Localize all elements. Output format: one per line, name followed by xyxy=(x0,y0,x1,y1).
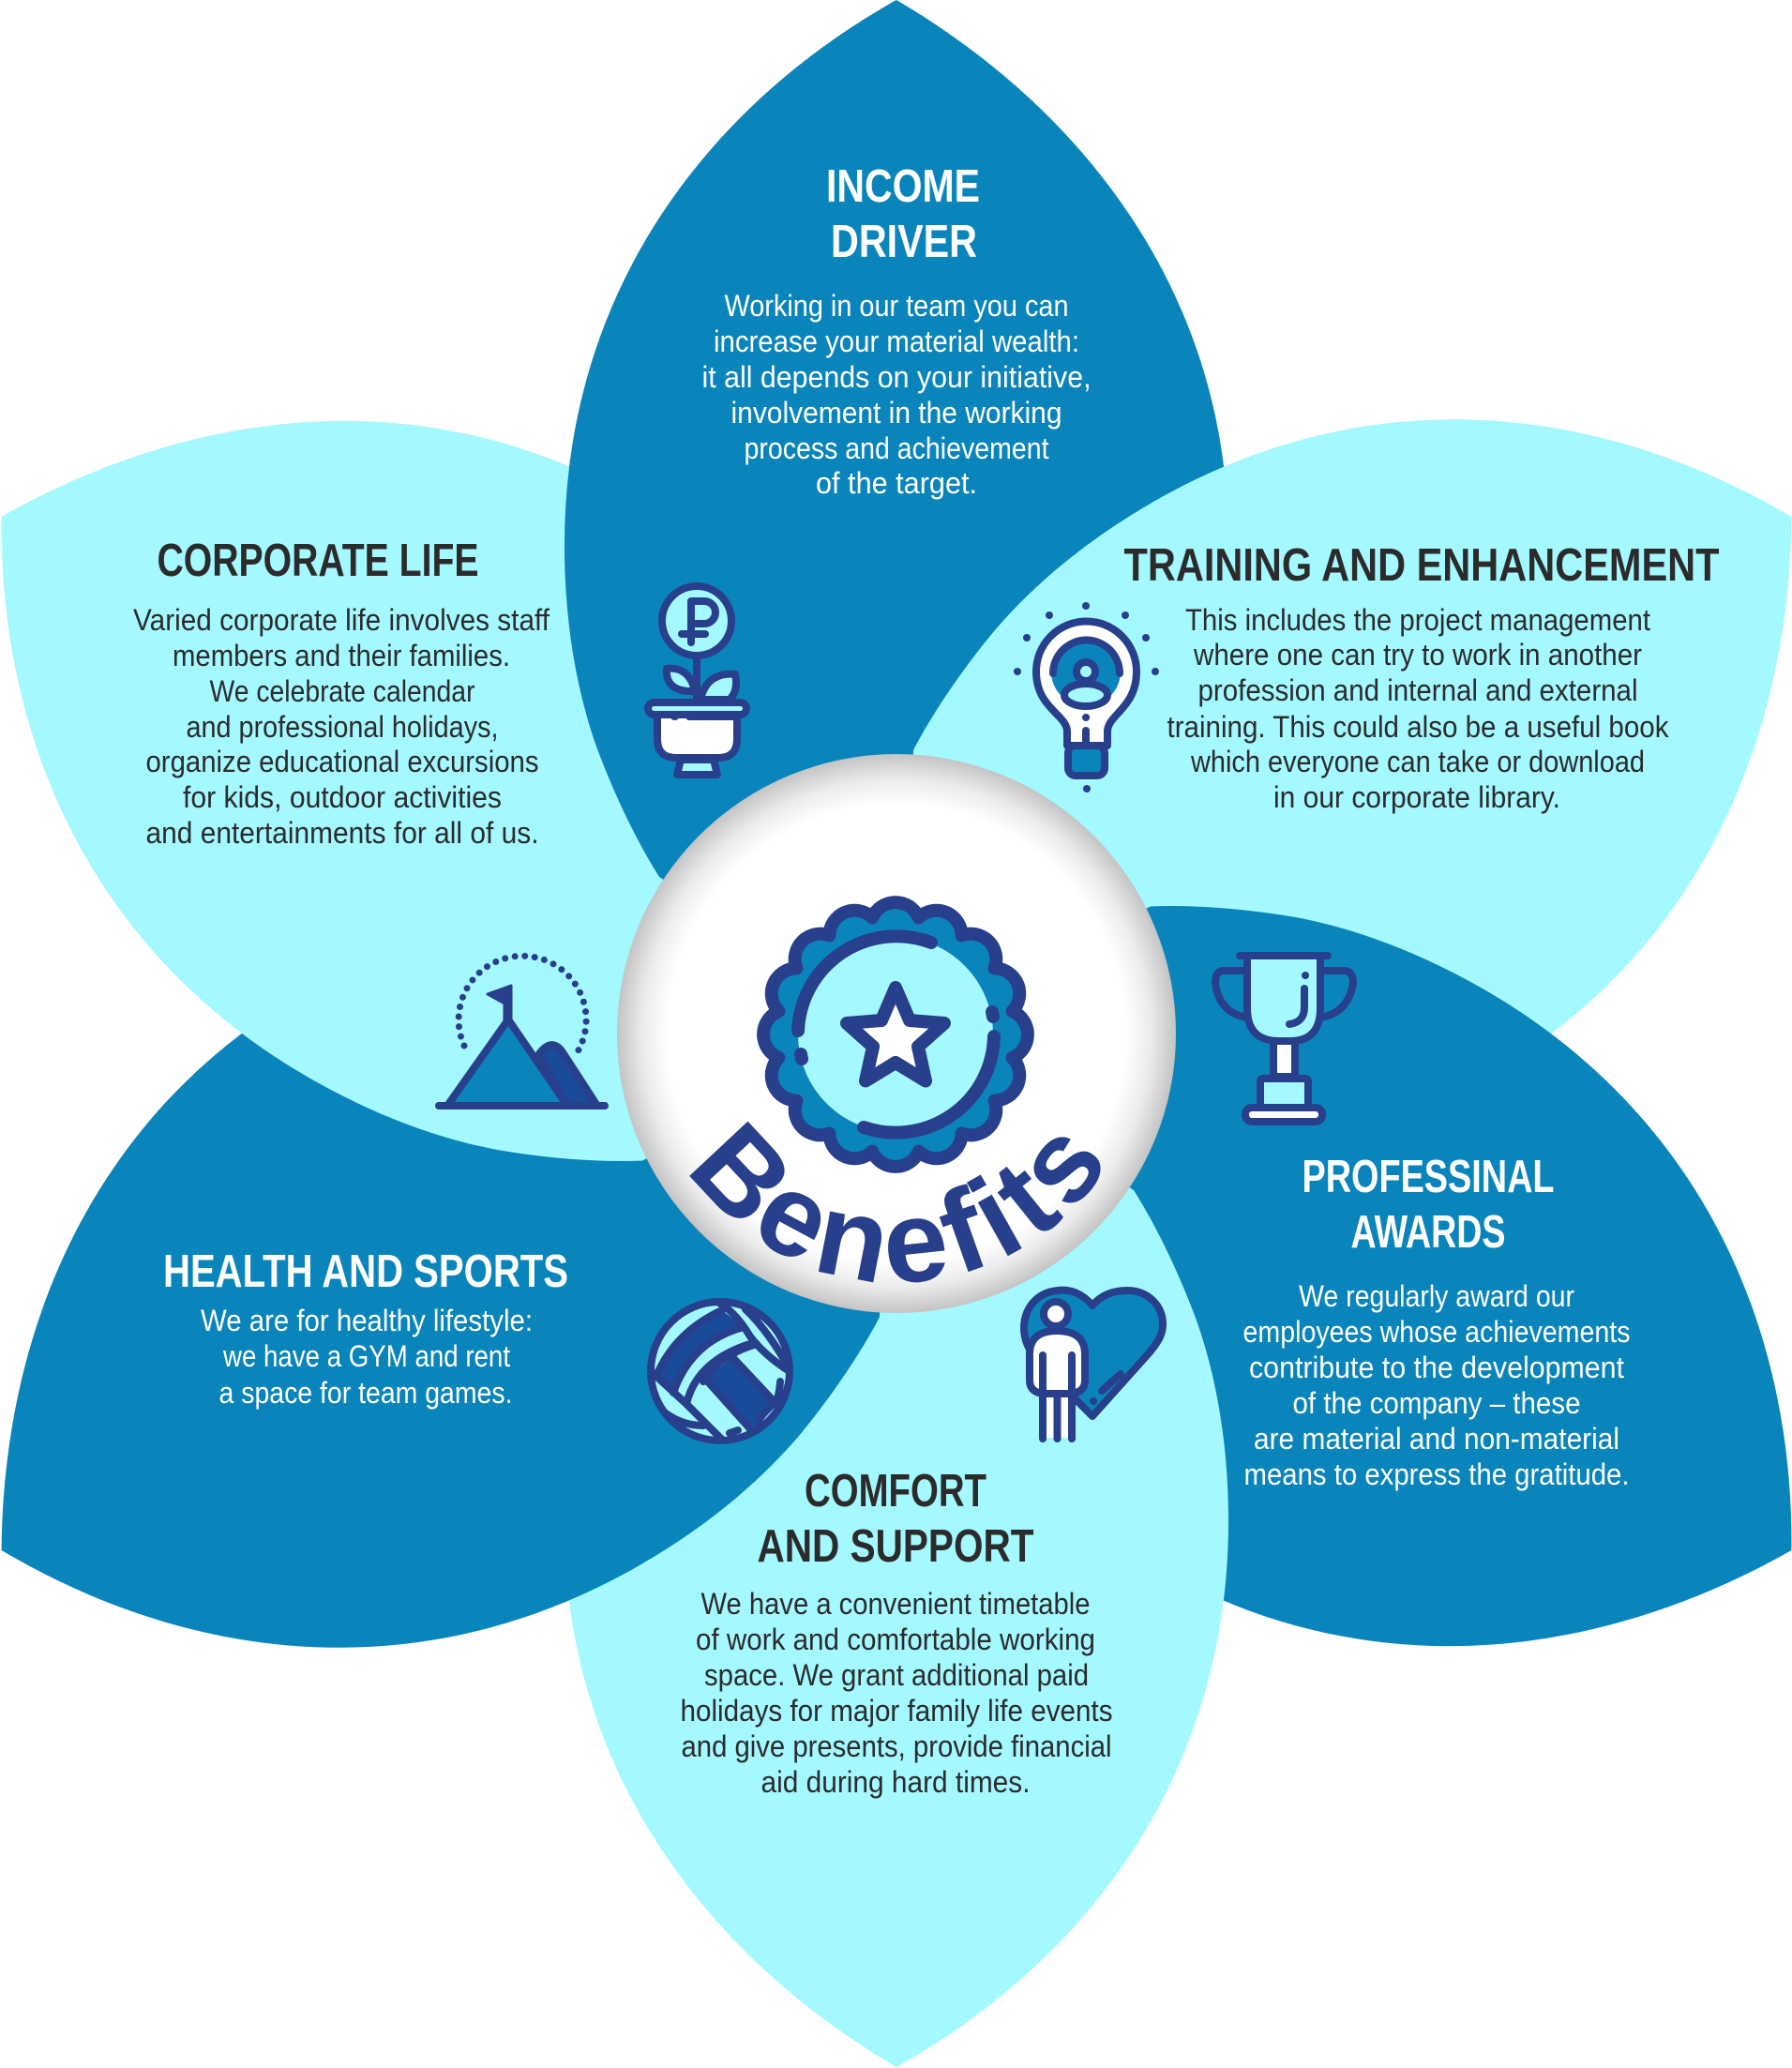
petal: corporate life xyxy=(0,229,1062,1321)
text block: health and sports xyxy=(201,1304,533,1410)
icon: person with heart xyxy=(1024,1291,1163,1439)
text block: health and sports: we have a GYM and rent xyxy=(222,1339,510,1373)
text block: income driver: process and achievement xyxy=(745,431,1049,465)
heading: comfort and support xyxy=(758,1466,1034,1572)
text block: professional awards: employees whose achievements xyxy=(1243,1315,1630,1349)
text block: income driver: Working in our team you can xyxy=(724,289,1069,323)
petal: training and enhancement xyxy=(730,229,1792,1321)
petal: professional awards xyxy=(730,746,1792,1838)
text block: professional awards: are material and non-material xyxy=(1254,1422,1619,1456)
heading: income driver: INCOME xyxy=(826,161,980,212)
text block: income driver: of the target. xyxy=(816,466,977,500)
icon: light bulb with person xyxy=(1014,602,1159,792)
text block: professional awards: We regularly award our xyxy=(1299,1279,1574,1313)
heading: professional awards: AWARDS xyxy=(1350,1207,1506,1258)
text block: training and enhancement: in our corporate library. xyxy=(1273,780,1560,814)
petal: income driver xyxy=(565,0,1228,1034)
heading: income driver xyxy=(826,161,980,267)
icon: trophy xyxy=(1215,956,1353,1122)
panel text: health and sports xyxy=(163,1246,568,1410)
heading: professional awards xyxy=(1302,1152,1555,1258)
central disc: benefits xyxy=(617,754,1176,1313)
title: Benefits: Benefits xyxy=(689,1122,1101,1283)
heading: professional awards: PROFESSINAL xyxy=(1302,1152,1555,1202)
text block: comfort and support: of work and comfortable working xyxy=(696,1623,1095,1656)
text block: comfort and support: space. We grant additional paid xyxy=(704,1658,1089,1692)
disc xyxy=(617,754,1176,1313)
text block: corporate life: We celebrate calendar xyxy=(210,674,475,708)
text block: professional awards: of the company – these xyxy=(1292,1386,1581,1420)
icon: scalloped badge with star xyxy=(763,902,1028,1167)
heading: comfort and support: COMFORT xyxy=(805,1466,986,1517)
panel text: professional awards xyxy=(1243,1152,1630,1491)
petal: comfort and support xyxy=(565,1034,1228,2067)
text block: comfort and support: We have a convenient timetable xyxy=(701,1587,1090,1621)
panel text: comfort and support xyxy=(681,1466,1112,1799)
text block: corporate life xyxy=(133,603,550,850)
text block: training and enhancement: This includes the project management xyxy=(1185,603,1650,637)
text block: professional awards: means to express the gratitude. xyxy=(1243,1457,1630,1491)
text block: corporate life: and professional holidays, xyxy=(186,710,499,744)
heading: corporate life: CORPORATE LIFE xyxy=(158,536,478,586)
text block: comfort and support: and give presents, provide financial xyxy=(681,1729,1112,1763)
text block: corporate life: organize educational excursions xyxy=(146,745,538,778)
text block: training and enhancement: profession and internal and external xyxy=(1198,673,1637,707)
icon: volleyball xyxy=(651,1302,791,1441)
panel text: income driver xyxy=(701,161,1092,500)
heading: health and sports: HEALTH AND SPORTS xyxy=(163,1246,568,1297)
text block: comfort and support: aid during hard times. xyxy=(761,1765,1030,1799)
text block: income driver xyxy=(701,289,1092,500)
text block: income driver: involvement in the working xyxy=(731,396,1062,430)
text block: professional awards: contribute to the development xyxy=(1249,1351,1624,1384)
petal: health and sports xyxy=(0,746,1062,1838)
text block: professional awards xyxy=(1243,1279,1630,1491)
text block: comfort and support xyxy=(681,1587,1112,1799)
icon: mountain with flag xyxy=(439,956,605,1106)
text block: training and enhancement: which everyone can take or download xyxy=(1190,745,1645,778)
text block: comfort and support: holidays for major family life events xyxy=(681,1694,1112,1728)
panel text: corporate life xyxy=(133,536,550,850)
text block: corporate life: Varied corporate life involves staff xyxy=(133,603,550,637)
icon: plant with ruble coin xyxy=(648,586,746,775)
petal overlap: income driver left half xyxy=(565,0,896,1034)
text block: training and enhancement: where one can try to work in another xyxy=(1193,638,1642,672)
text block: income driver: increase your material wealth: xyxy=(714,325,1079,358)
text block: health and sports: We are for healthy lifestyle: xyxy=(201,1304,533,1337)
heading: comfort and support: AND SUPPORT xyxy=(758,1521,1034,1572)
text block: corporate life: for kids, outdoor activities xyxy=(183,780,502,814)
text block: corporate life: and entertainments for all of us. xyxy=(146,816,538,850)
panel text: training and enhancement xyxy=(1123,540,1720,814)
text block: training and enhancement xyxy=(1167,603,1669,814)
text block: corporate life: members and their families. xyxy=(173,639,510,672)
text block: health and sports: a space for team games. xyxy=(219,1376,512,1410)
text block: income driver: it all depends on your initiative, xyxy=(701,360,1092,394)
text block: training and enhancement: training. This could also be a useful book xyxy=(1167,710,1669,744)
heading: income driver: DRIVER xyxy=(831,217,977,267)
